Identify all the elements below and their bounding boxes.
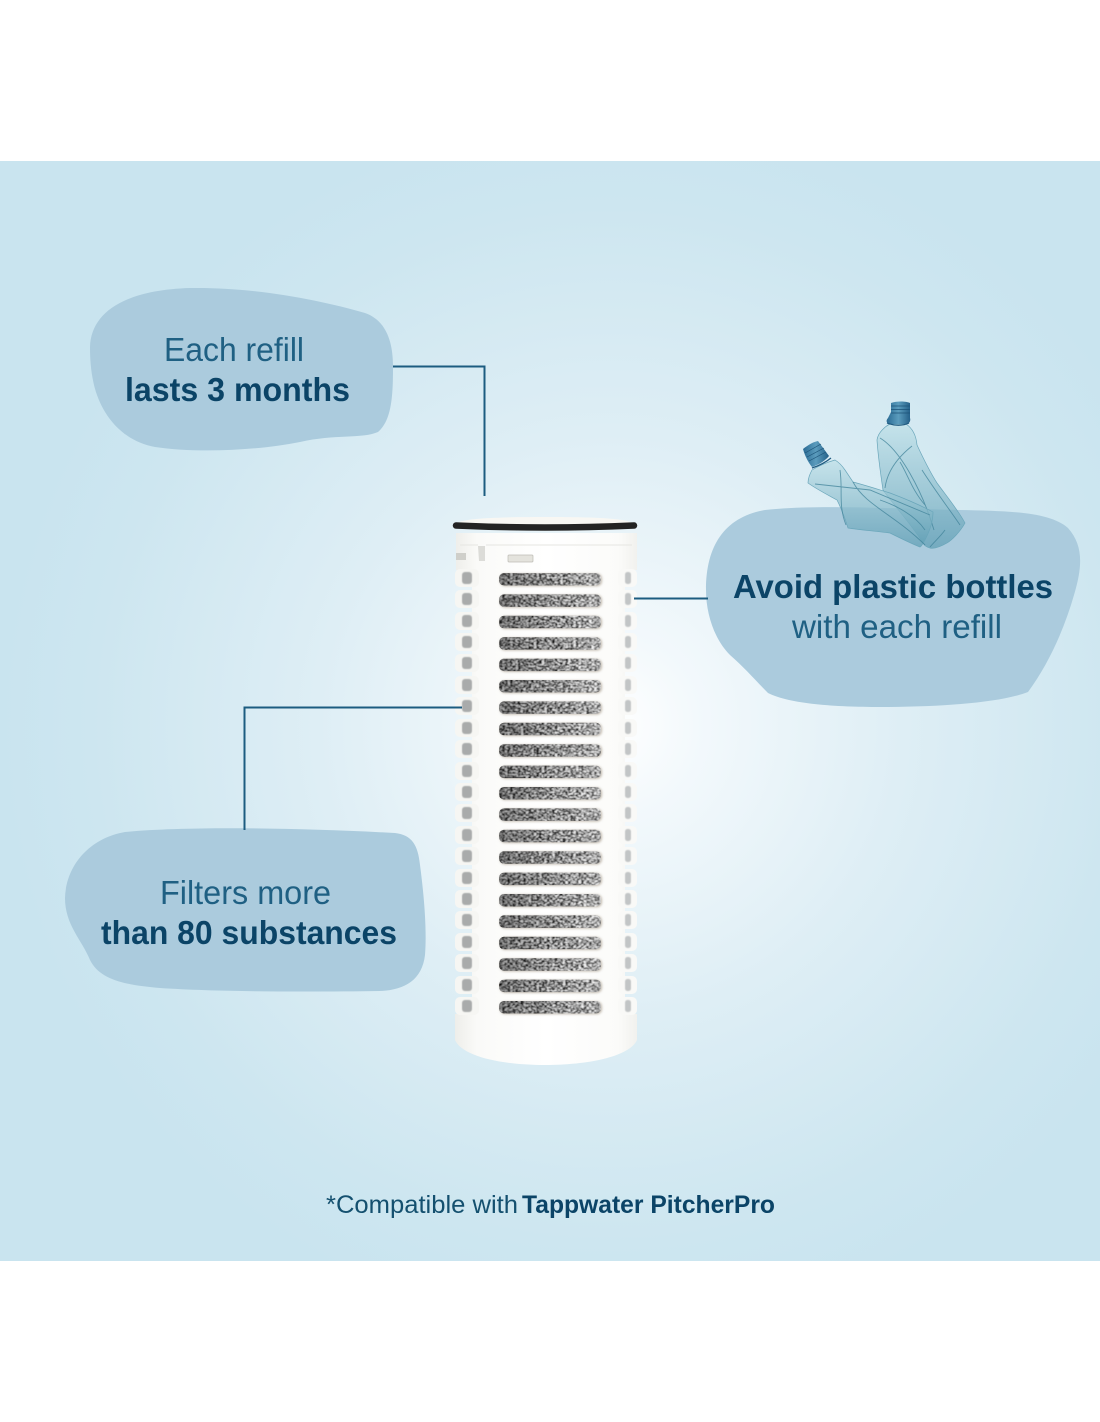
right ribs — [618, 569, 637, 1015]
right crushed bottle — [877, 402, 965, 548]
connector: refill duration to filter — [393, 366, 484, 496]
product: filter cartridge — [455, 517, 637, 1065]
callout: filters more than 80 substances — [65, 828, 426, 992]
callout: avoid plastic bottles: Avoid plastic bottles — [733, 568, 1053, 605]
carbon fibre slots — [499, 573, 601, 1014]
left ribs — [455, 569, 479, 1015]
left crushed bottle — [803, 441, 933, 547]
footnote: Tappwater PitcherPro — [522, 1191, 775, 1219]
callout: each refill lasts 3 months — [90, 288, 393, 450]
footnote — [326, 1191, 775, 1219]
callout: each refill lasts 3 months: lasts 3 months — [125, 371, 350, 408]
callout: filters more than 80 substances: Filters more — [160, 874, 331, 911]
callout: filters more than 80 substances: than 80 substances — [101, 914, 397, 951]
black gasket — [456, 526, 634, 528]
filter body — [455, 533, 637, 1065]
connector: substances to filter — [244, 708, 462, 830]
left holes — [462, 572, 472, 1012]
background band — [0, 161, 1100, 1261]
callout: each refill lasts 3 months: Each refill — [164, 331, 304, 368]
lid — [456, 517, 634, 529]
callout: avoid plastic bottles: with each refill — [791, 608, 1002, 645]
icon: crushed plastic bottles — [803, 402, 965, 548]
callout: avoid plastic bottles — [706, 507, 1080, 707]
connector: plastic bottles to filter — [634, 598, 708, 600]
footnote: *Compatible with — [326, 1191, 518, 1219]
top details — [456, 545, 632, 562]
right holes — [625, 572, 631, 1012]
